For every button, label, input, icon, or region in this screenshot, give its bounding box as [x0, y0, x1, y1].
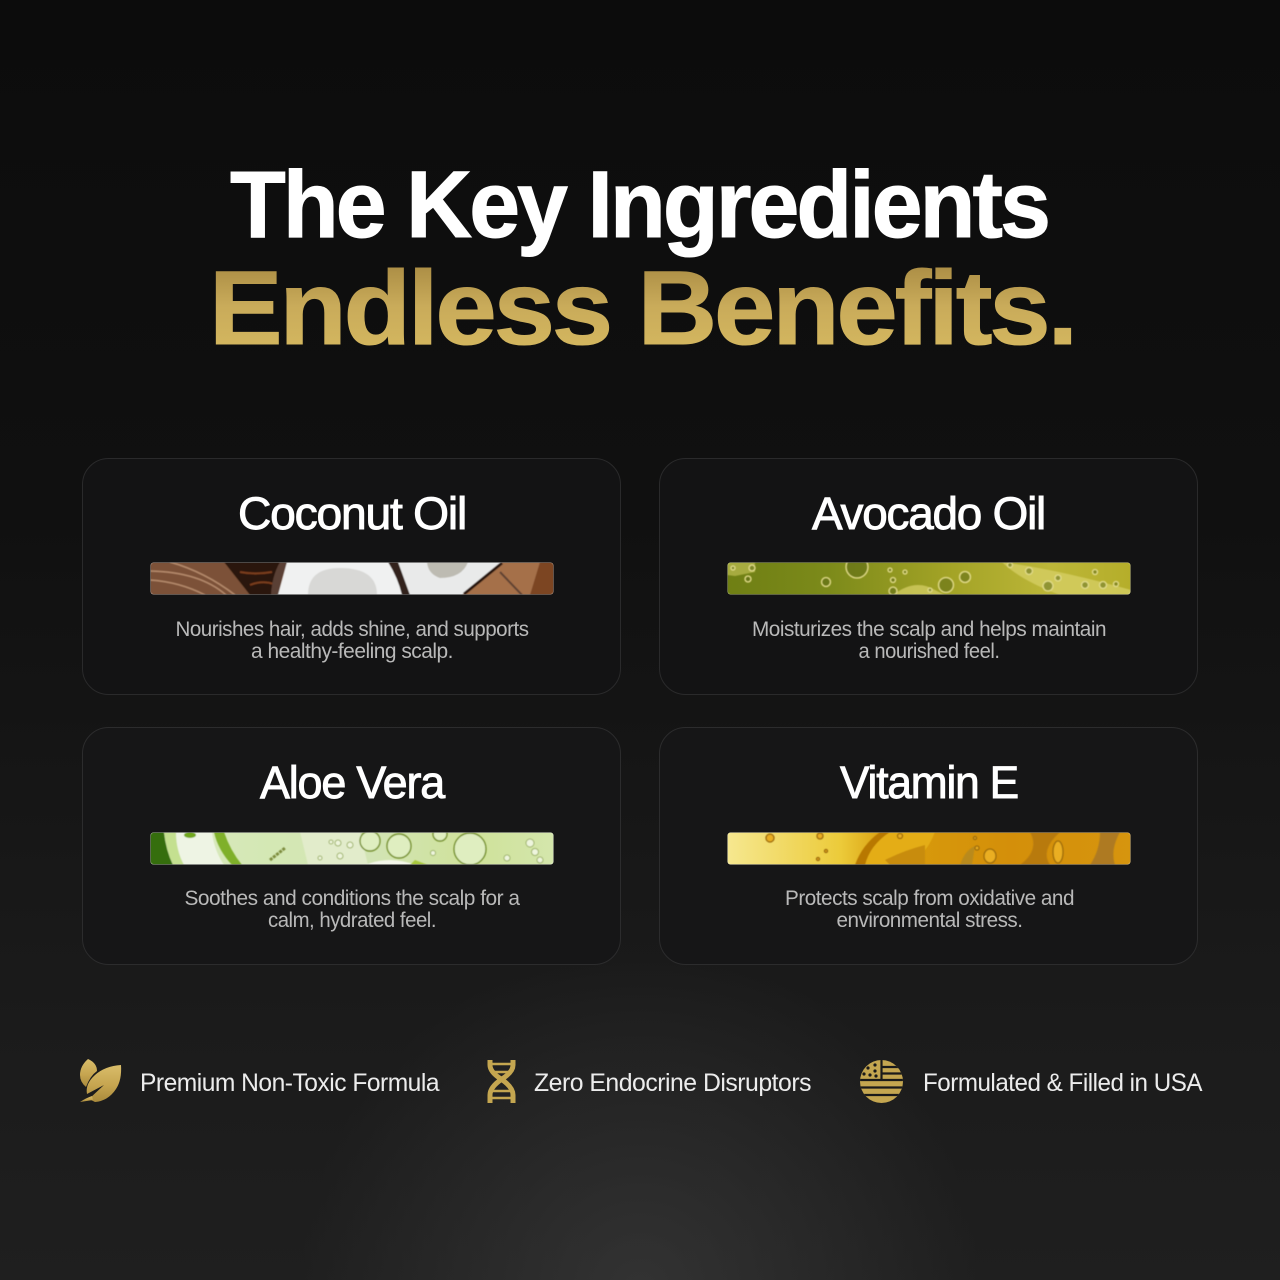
description: aloe vera — [184, 887, 520, 932]
feature: endocrine disruptors — [490, 1060, 811, 1103]
image strip: vitamin e — [727, 832, 1131, 865]
description: vitamin e: Protects scalp from oxidative and — [785, 887, 1074, 910]
heading: vitamin e: Vitamin E — [840, 757, 1018, 808]
feature: non-toxic formula — [80, 1059, 440, 1102]
title: Endless Benefits. — [209, 250, 1075, 367]
panel: vitamin e — [660, 728, 1198, 964]
title — [209, 152, 1075, 367]
description: avocado oil: Moisturizes the scalp and helps maintain — [752, 618, 1106, 641]
label: endocrine disruptors: Zero Endocrine Disruptors — [534, 1069, 811, 1097]
description: coconut oil: Nourishes hair, adds shine, and supports — [176, 618, 528, 641]
description: avocado oil — [752, 618, 1106, 663]
description: aloe vera: Soothes and conditions the scalp for a — [184, 887, 520, 910]
label: made in usa: Formulated & Filled in USA — [923, 1069, 1203, 1097]
description: coconut oil: a healthy-feeling scalp. — [251, 640, 453, 663]
description: avocado oil: a nourished feel. — [858, 640, 1000, 663]
icon: leaves — [80, 1059, 121, 1102]
heading: coconut oil: Coconut Oil — [238, 488, 466, 539]
icon: usa flag globe — [860, 1060, 903, 1104]
description: coconut oil — [176, 618, 528, 663]
icon: dna helix — [490, 1060, 513, 1103]
description: vitamin e — [785, 887, 1074, 932]
description: vitamin e: environmental stress. — [836, 909, 1022, 932]
title: The Key Ingredients — [230, 152, 1048, 258]
image strip: avocado — [728, 562, 1130, 594]
feature: made in usa — [860, 1060, 1203, 1104]
description: aloe vera: calm, hydrated feel. — [268, 909, 436, 932]
panel: avocado oil — [660, 458, 1198, 694]
heading: aloe vera: Aloe Vera — [260, 757, 446, 808]
label: non-toxic formula: Premium Non-Toxic Formula — [140, 1069, 440, 1097]
image strip: aloe — [150, 832, 554, 864]
heading: avocado oil: Avocado Oil — [812, 488, 1045, 539]
panel: coconut oil — [82, 458, 620, 694]
panel: aloe vera — [82, 728, 620, 964]
image strip: coconut — [150, 562, 554, 595]
